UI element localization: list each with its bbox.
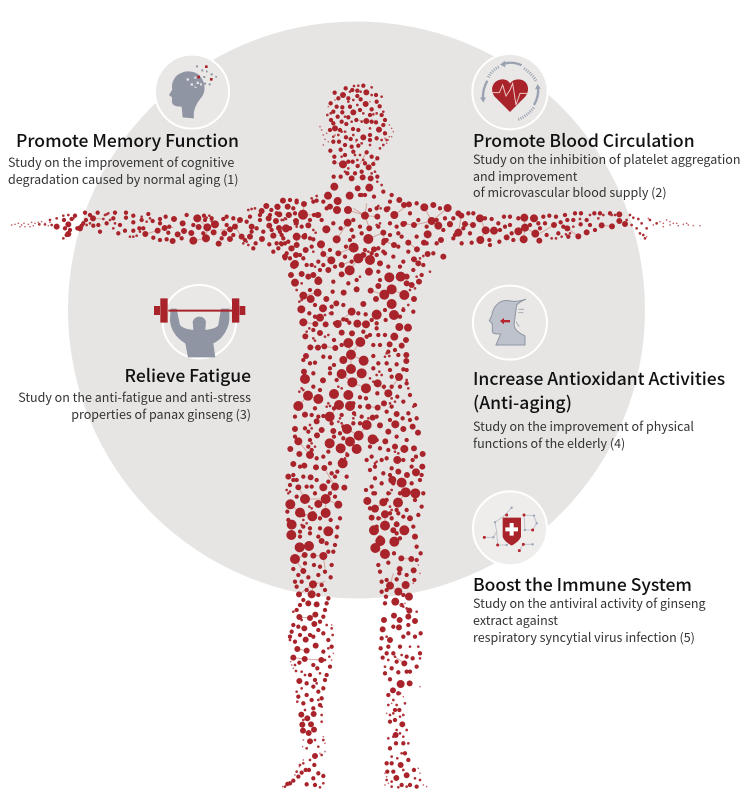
text block: and improvement xyxy=(473,166,578,185)
heading: Promote Blood Circulation xyxy=(473,128,695,153)
text block: Study on the inhibition of platelet aggregation xyxy=(473,149,740,168)
text block: respiratory syncytial virus infection (5) xyxy=(473,627,695,646)
heading: Relieve Fatigue xyxy=(125,363,251,388)
text block: properties of panax ginseng (3) xyxy=(71,404,251,423)
panel: boost the immune system xyxy=(473,491,706,646)
text block: degradation caused by normal aging (1) xyxy=(8,169,238,188)
icon: head with memory pixels xyxy=(155,55,229,129)
text block: extract against xyxy=(473,610,558,629)
background circle xyxy=(68,22,645,598)
text block: Study on the antiviral activity of ginseng xyxy=(473,593,706,612)
heading: Boost the Immune System xyxy=(473,572,692,597)
text block: Study on the improvement of physical xyxy=(473,416,694,435)
panel: increase antioxidant activities xyxy=(473,286,725,452)
icon: aging head profile xyxy=(473,286,547,360)
heading: Increase Antioxidant Activities xyxy=(473,366,725,391)
text block: Study on the anti-fatigue and anti-stress xyxy=(18,387,251,406)
text block: Study on the improvement of cognitive xyxy=(8,152,234,171)
panel: promote blood circulation xyxy=(472,54,740,201)
body: lower legs and feet xyxy=(283,541,427,787)
body: right arm xyxy=(450,213,700,245)
human body network figure xyxy=(12,86,700,787)
icon: heart with circulation arrows xyxy=(472,54,548,129)
text block: of microvascular blood supply (2) xyxy=(473,182,667,201)
icon: shield with molecules xyxy=(473,491,547,565)
panel: relieve fatigue xyxy=(18,285,251,423)
icon: weightlifter xyxy=(154,285,245,358)
body: lower torso and thighs xyxy=(287,281,423,538)
heading: Promote Memory Function xyxy=(16,128,239,153)
text block: functions of the elderly (4) xyxy=(473,433,625,452)
body: left arm xyxy=(12,201,297,264)
heading continuation: (Anti-aging) xyxy=(473,390,572,415)
body: head and upper torso xyxy=(271,86,450,280)
panel: promote memory function xyxy=(8,55,239,188)
